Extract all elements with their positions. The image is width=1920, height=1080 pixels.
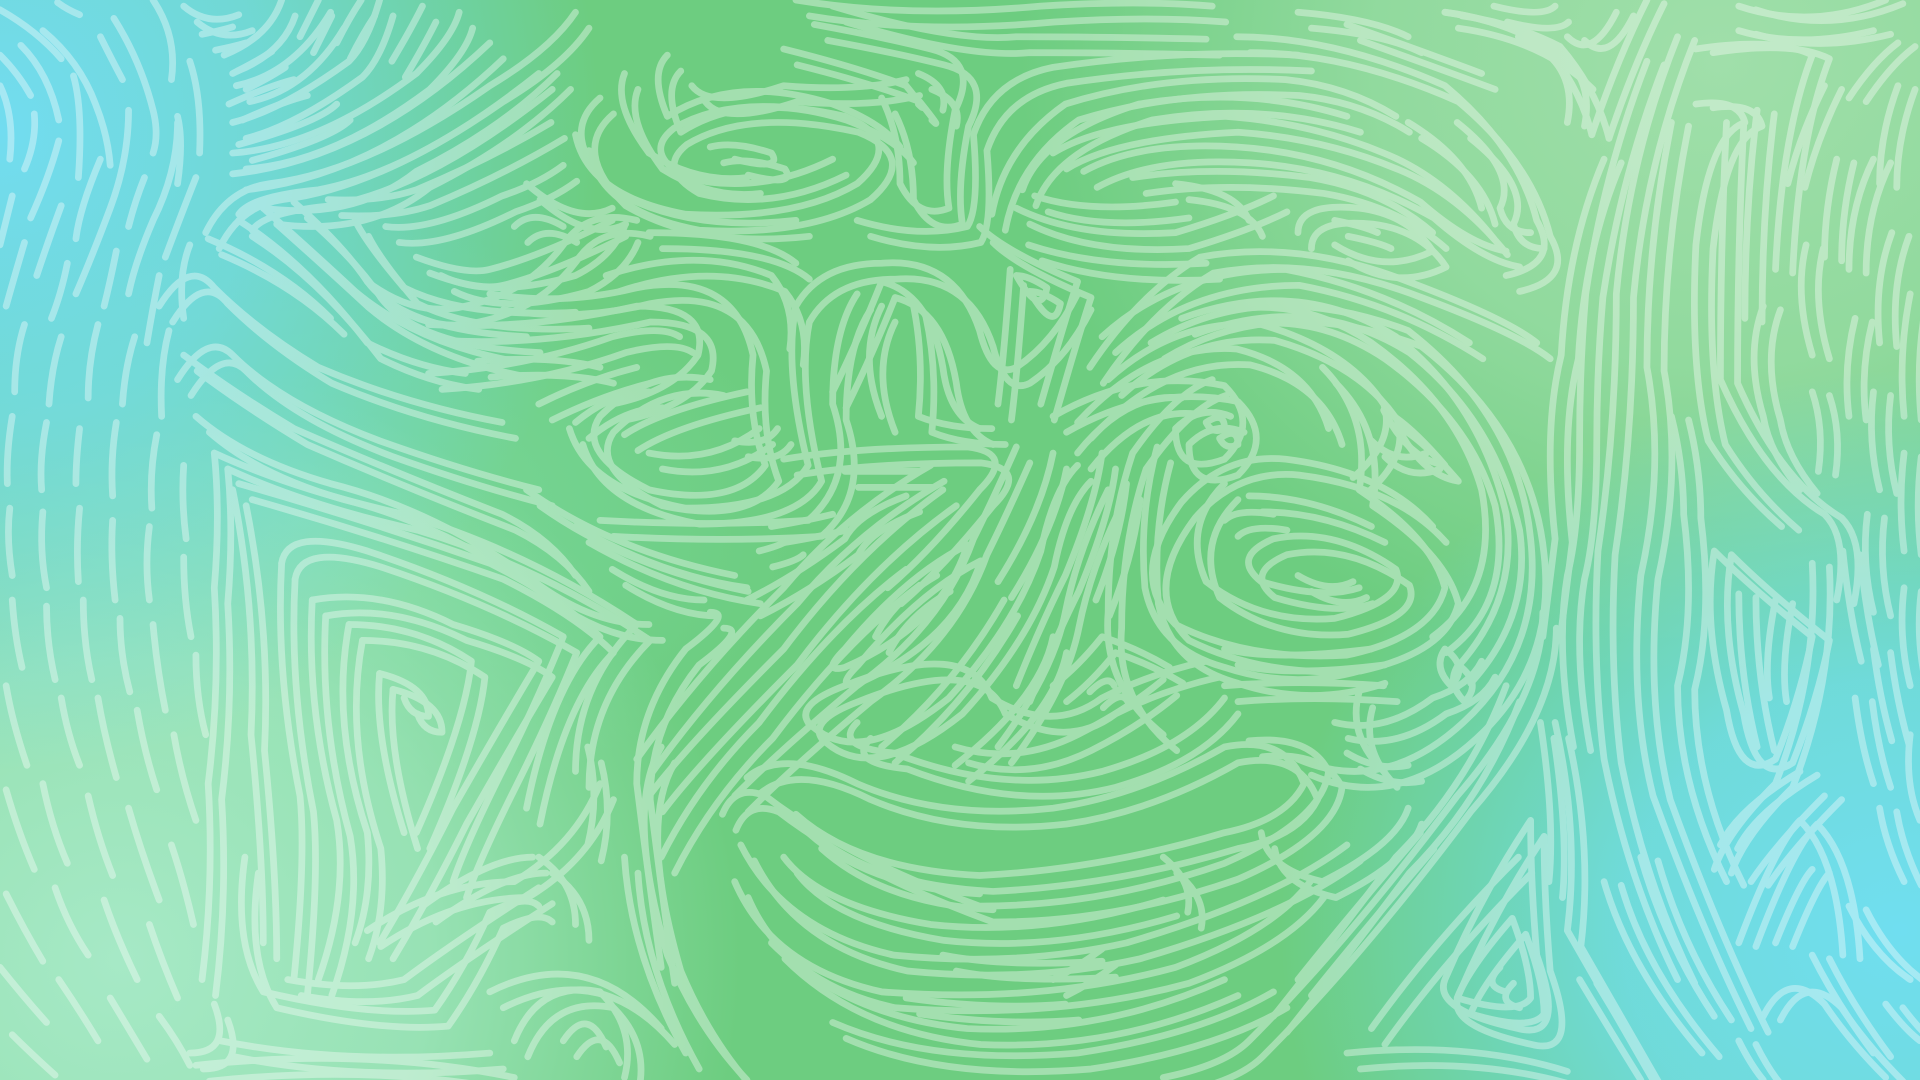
long diagonal ridges: [588, 380, 1212, 1080]
top-left ridges fanning from centre: [159, 0, 649, 624]
bottom-right triangular motif: [1347, 722, 1653, 1080]
lower central whorl: [722, 612, 1543, 1078]
right-centre large whorl: [998, 301, 1532, 771]
central ridge structures: [159, 0, 1653, 1080]
middle whorl and folds: [367, 184, 1537, 600]
right vertical ridges: [1445, 0, 1920, 1080]
bottom-left spiral and folds: [190, 453, 661, 1078]
left dashed ridges: [0, 0, 206, 1075]
top central whorl: [576, 0, 1580, 276]
